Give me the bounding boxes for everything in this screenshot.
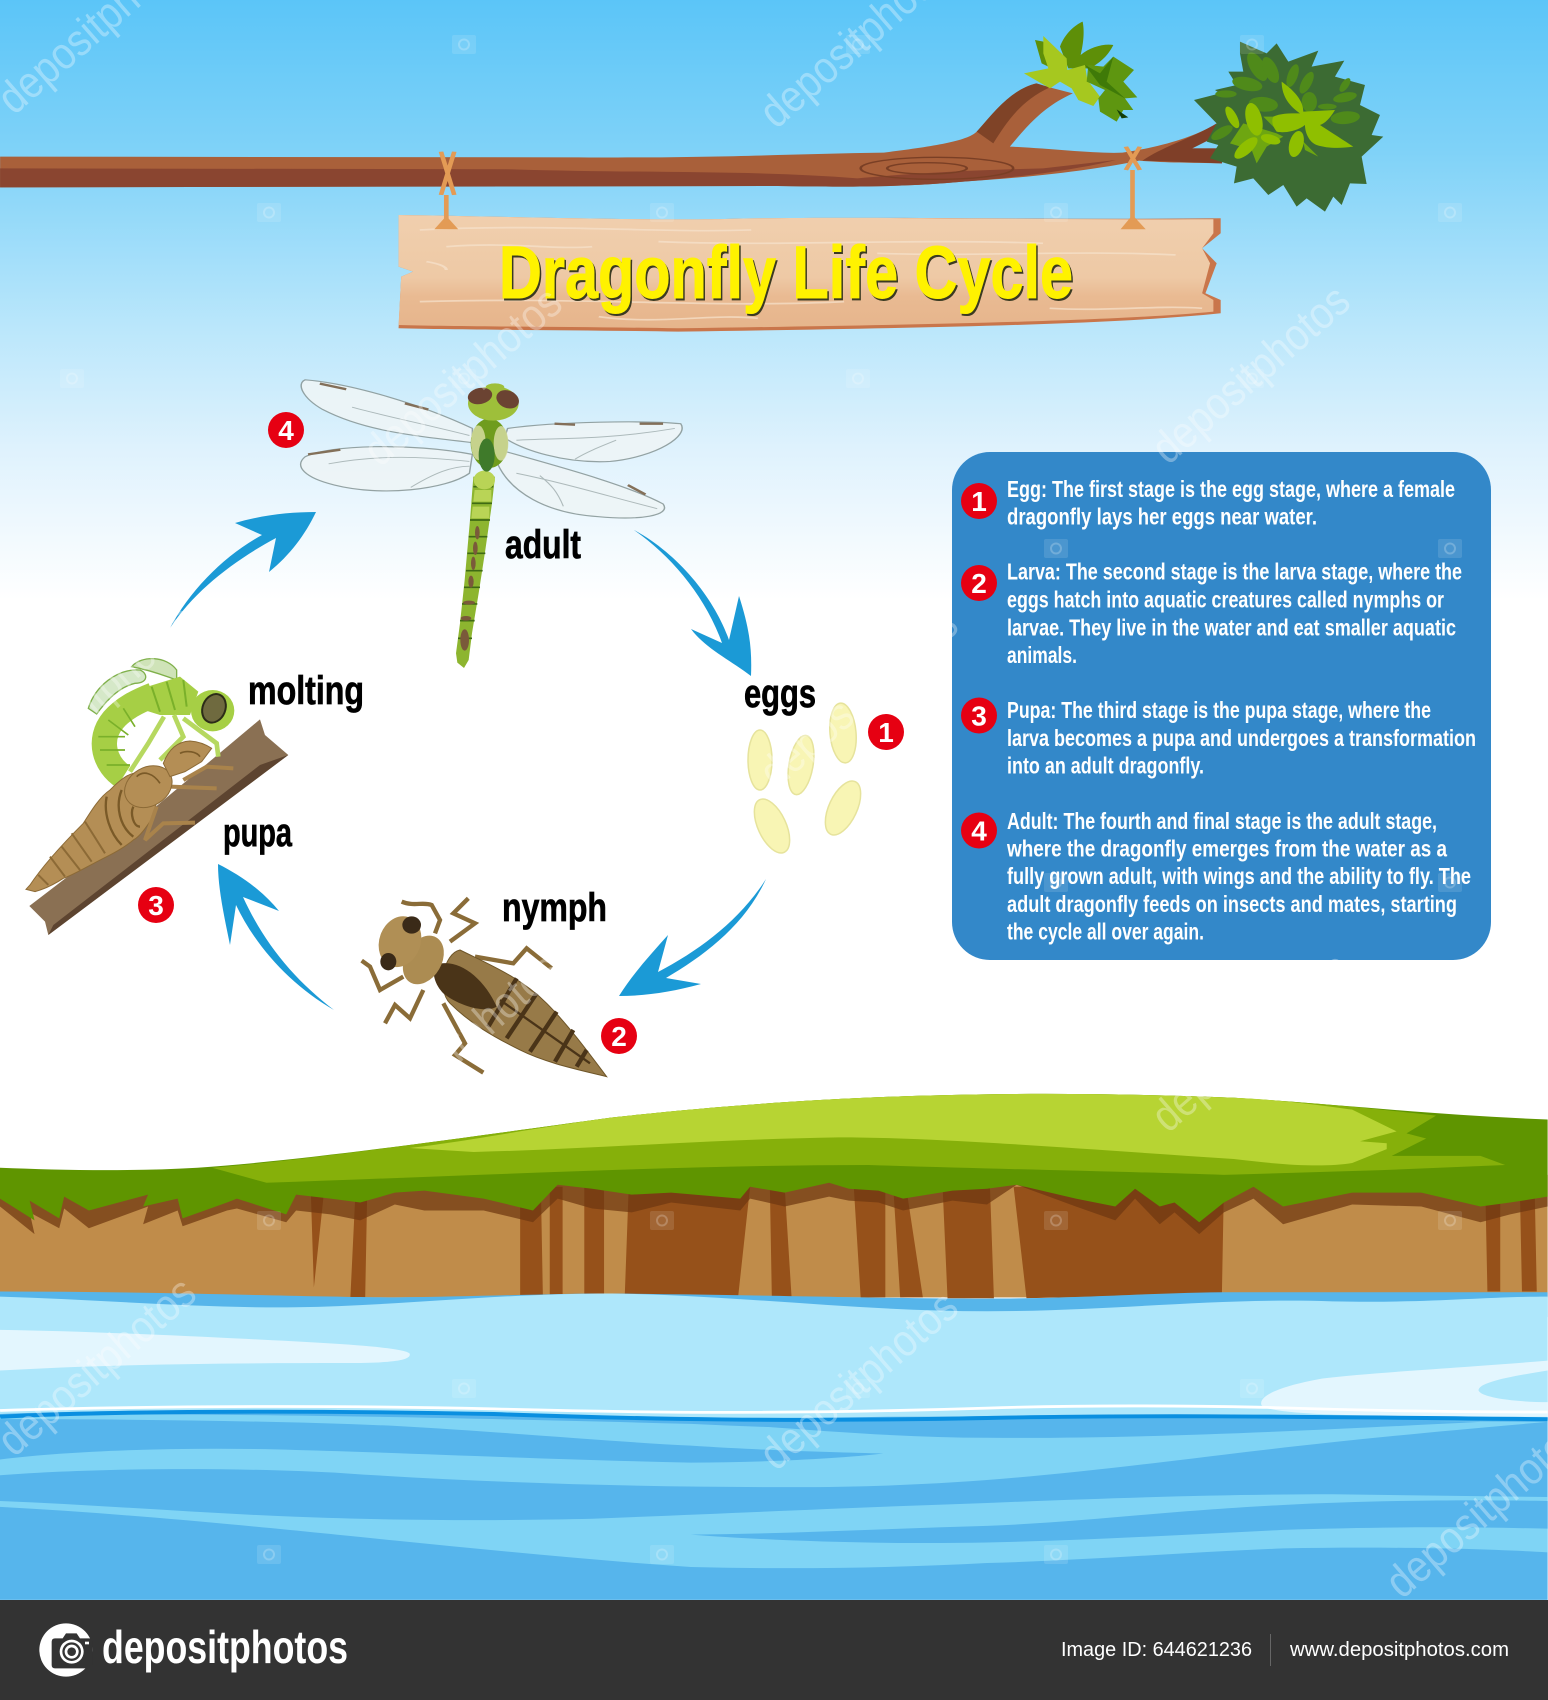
stage 2 text [961, 559, 1462, 668]
arrow: adult to eggs [634, 530, 751, 676]
stage 4 text: 4 [971, 816, 987, 846]
badge: 4: 4 [278, 415, 294, 446]
sky background [0, 0, 1548, 620]
nymph [362, 898, 607, 1077]
stage 1 text: 1 [971, 486, 987, 517]
stage 1 text: dragonfly lays her eggs near water. [1007, 504, 1317, 530]
tree branch [0, 83, 1222, 187]
rope: left [434, 152, 458, 229]
molting adult [88, 659, 234, 777]
badge: 2 [601, 1018, 637, 1054]
river water [0, 1291, 1548, 1600]
label: molting: molting [248, 669, 364, 713]
image id: Image ID: 644621236 [1061, 1639, 1252, 1661]
wing: lower right [498, 450, 665, 518]
wooden sign [399, 215, 1221, 332]
title: Dragonfly Life Cycle [500, 233, 1074, 316]
thorax [394, 928, 452, 992]
grass shadow [0, 1175, 1548, 1234]
log [29, 719, 288, 935]
wing: upper left [301, 380, 472, 443]
wing: upper right [505, 422, 682, 462]
molting dragonfly on log [26, 659, 288, 935]
watermark overlay: depositphotos [1141, 942, 1359, 1142]
grass [0, 1094, 1548, 1222]
thorax [471, 419, 508, 472]
dragonfly body [456, 383, 522, 668]
soil [0, 1175, 1548, 1297]
light water [0, 1293, 1548, 1420]
stage 3 text: into an adult dragonfly. [1007, 753, 1204, 779]
label: adult: adult [505, 523, 581, 567]
dragonfly wings [301, 380, 682, 518]
stage 4 text [961, 808, 1471, 945]
title: Dragonfly Life Cycle [499, 231, 1073, 314]
rope: right [1121, 147, 1146, 229]
badge: 1: 1 [878, 717, 894, 748]
legs and antennae [362, 898, 552, 1073]
wing pads [434, 963, 497, 1009]
abdomen [443, 950, 607, 1077]
riverbank ground [0, 1094, 1548, 1298]
head [372, 910, 428, 973]
watermark overlay: depositphotos [351, 942, 569, 1142]
deep water [0, 1410, 1548, 1600]
badge: 3: 3 [148, 890, 164, 921]
stage 3 text: 3 [971, 700, 987, 732]
footer bar [0, 1600, 1548, 1700]
arrow: nymph to pupa [218, 864, 334, 1010]
watermark overlay: depositphotos [749, 1280, 967, 1480]
abdomen [456, 471, 495, 668]
stage 4 text: Adult: The fourth and final stage is the adult stage, [1007, 808, 1437, 834]
panel: stage descriptions [952, 452, 1491, 960]
deep current line [0, 1412, 1548, 1420]
light water bands [0, 1414, 1548, 1568]
logo: wordmark: depositphotos [102, 1621, 348, 1673]
label: nymph: nymph [502, 886, 607, 930]
stage 3 text [961, 697, 1476, 779]
stage 2 text: animals. [1007, 642, 1077, 668]
right foam [1261, 1361, 1548, 1417]
badge: 3 [138, 887, 174, 923]
wing: lower left [301, 447, 472, 491]
logo: camera mark [39, 1623, 93, 1677]
badge: 2: 2 [611, 1021, 627, 1052]
stage 1 text [961, 476, 1455, 530]
shore edge band [0, 1291, 1548, 1317]
badge: 1 [868, 714, 904, 750]
icon: small leaf cluster [1024, 22, 1137, 122]
website: www.depositphotos.com [1289, 1639, 1509, 1661]
watermark overlay: depositphotos [1141, 274, 1359, 474]
badge: 4 [268, 412, 304, 448]
left foam [0, 1330, 410, 1371]
watermark overlay: depositphotos [353, 276, 571, 476]
eggs [747, 702, 868, 858]
stage 3 text: Pupa: The third stage is the pupa stage, where the [1007, 697, 1431, 723]
stage 4 text: the cycle all over again. [1007, 919, 1204, 945]
stage 2 text: 2 [971, 568, 987, 599]
arrow: molting to adult [170, 512, 316, 628]
icon: large leaf cluster [1194, 42, 1383, 212]
foam line [0, 1406, 1548, 1412]
stage 4 text: where the dragonfly emerges from the water as a [1006, 836, 1447, 862]
shed pupa skin [26, 741, 233, 892]
label: eggs: eggs [744, 672, 816, 716]
label: pupa: pupa [223, 811, 293, 855]
arrow: eggs to nymph [619, 879, 766, 996]
watermark overlay: depositphotos [749, 598, 967, 798]
head [466, 383, 522, 421]
